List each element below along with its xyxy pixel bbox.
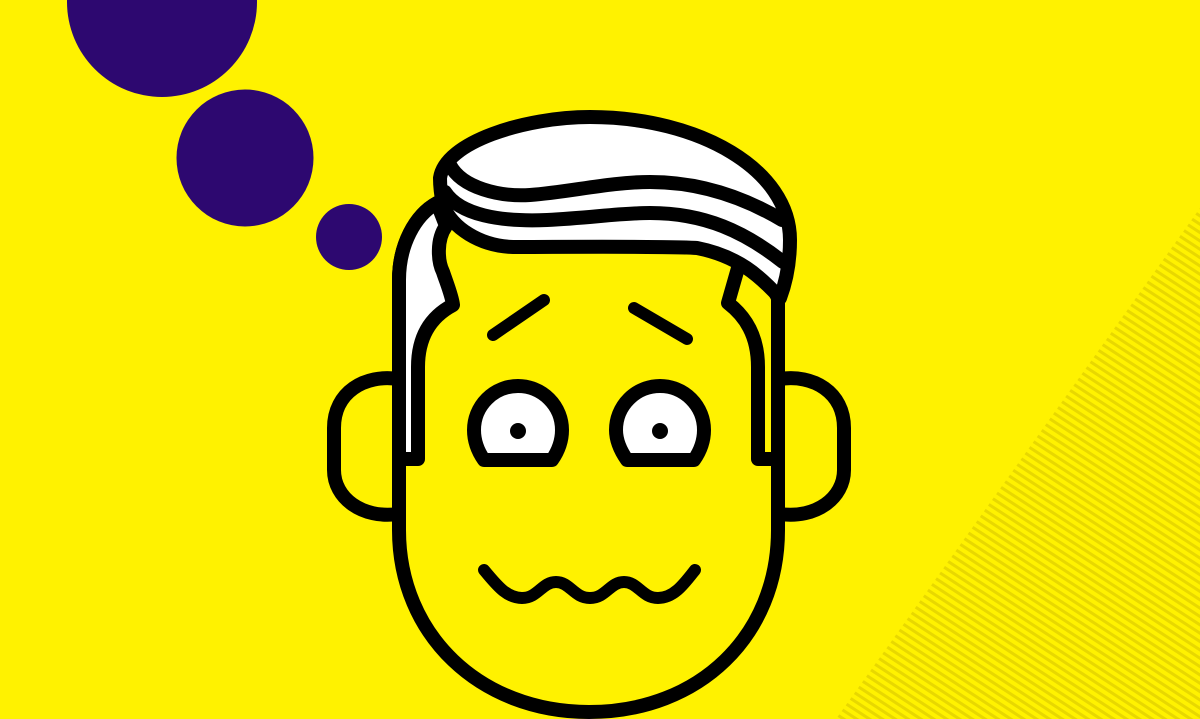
left pupil (510, 423, 526, 439)
face outline (399, 203, 778, 712)
left eyebrow (493, 300, 544, 335)
hair (440, 117, 790, 298)
mouth (484, 570, 695, 598)
left eye (474, 386, 562, 460)
thought bubbles (67, 0, 382, 270)
right pupil (652, 423, 668, 439)
right sideburn (728, 268, 778, 459)
left sideburn (399, 203, 453, 459)
left ear (334, 378, 398, 515)
striped corner triangle (836, 208, 1200, 719)
right ear (780, 378, 844, 515)
head (334, 117, 844, 712)
right eyebrow (634, 308, 687, 339)
right eye (616, 386, 704, 460)
